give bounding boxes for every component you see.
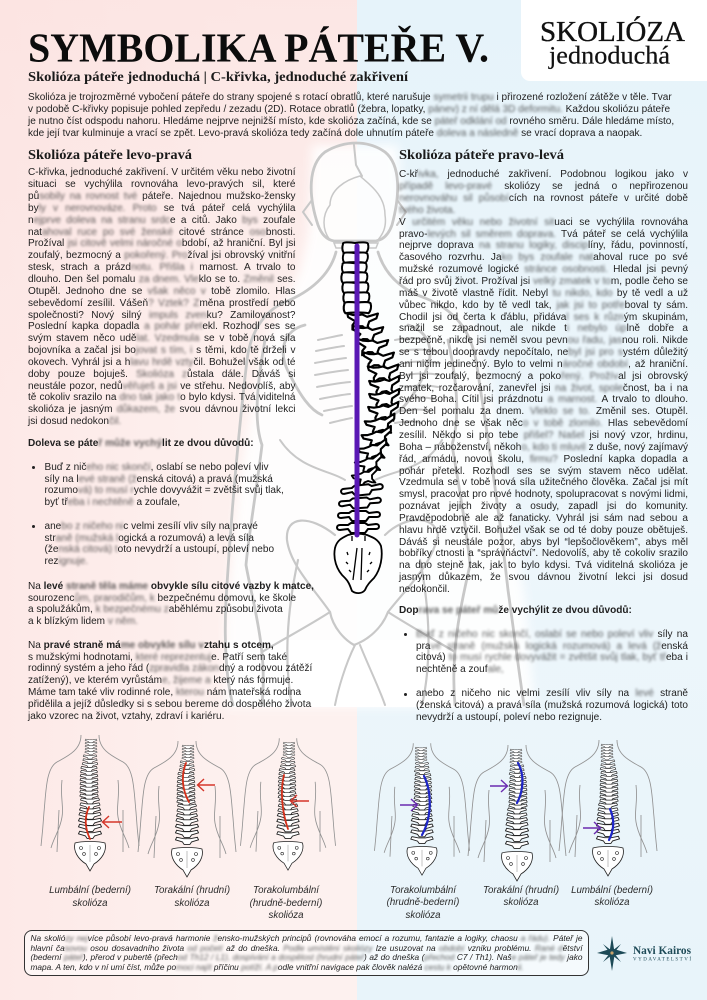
caption: thoracic right: skolióza	[504, 897, 538, 908]
diagram: thoracic right	[468, 745, 566, 881]
list: left column reasons	[32, 461, 284, 568]
caption: lumbar right: skolióza	[594, 897, 630, 908]
text: right column story: na dno stejně tak, jak to bylo kdysi. Tvá viditelná skolióza je	[399, 560, 688, 571]
bullet two: (ženská citová) a pravá síla (mužská rozumová logická) toto	[416, 700, 688, 711]
text: right column story: bezpečně, nikde jsi neměl svou pevnou řadu, jasnou roli. Nikde	[399, 335, 688, 346]
bullet two: anebo z ničeho nic velmi zesílí vliv síly na pravé	[44, 521, 258, 532]
text: right column intro: případě levo-pravé skoliózy se jedná o nepřirozenou	[399, 181, 688, 192]
intro paragraph: kde její tvar kulminuje a vrací se zpět. Levo-pravá skolióza tedy začíná dole uhnutím páteře doleva a následně se vrací doprava a naopak.	[28, 128, 642, 139]
bullet two: anebo z ničeho nic velmi zesílí vliv síly na levé straně	[416, 688, 688, 699]
text: right column story: řád, armádu, novou školu, firmu? Poslední kapka dopadla a	[399, 454, 688, 465]
bullet one: nechtěně a zoufale,	[416, 664, 504, 675]
text: right column story: svého Boha. Cítil jsi prázdnotu a marnost. A trvalo to dlouho.	[399, 394, 688, 405]
callout: bottom note: (bederní páteř), přerod v pubertě (přechod Th12 / L1), dospívání a dospělost (hrudní páteř) až do dneška (přechod C7 / Th1). Naše páteř je tedy jako	[30, 952, 582, 962]
text: right column intro	[398, 168, 688, 216]
text: left column reasons heading: Doleva se páteř může vychýlit ze dvou důvodů:	[28, 438, 254, 449]
text: left column story: Otupěl. Jednoho dne se však něco v tobě zlomilo. Hlas	[28, 286, 295, 297]
caption: thoracic right: Torakální (hrudní)	[483, 884, 559, 896]
text: left column story: působily na rovnost tvé páteře. Najednou mužsko-žensky	[28, 191, 296, 202]
text: left column story: situaci se vychýlila rovnováha levo-pravých sil, které	[28, 179, 296, 190]
background: right blue half	[357, 0, 707, 1000]
text: right column story: Chodil jsi od čerta k ďáblu, přidával ses k různým skupinám,	[399, 312, 688, 323]
text: right column story: Jednoho dne se však něco v tobě zlomilo. Hlas sebevědomí	[399, 418, 688, 429]
text: right column intro: nerovnováhu sil působících na rovnost páteře v určité době	[399, 193, 688, 204]
list: right column reasons	[404, 628, 688, 723]
diagram: lumbar left	[41, 735, 139, 871]
text: left side mother: Na levé straně těla máme obvykle sílu citové vazby k matce,	[28, 581, 314, 592]
text: left column story: Poslední kapka dopadla a pohár přetekl. Rozhodl ses se	[28, 321, 295, 332]
text: right column story: časového rozvrhu. Jako bys zoufale natahoval ruce po své	[399, 252, 688, 263]
caption: thoracolumbar right	[387, 884, 459, 921]
icon: compass star	[597, 936, 627, 971]
diagram: thoracolumbar left	[240, 738, 336, 870]
text: right side father: Máme tam také vliv rodinné role, kterou nám mateřská rodina	[28, 687, 301, 698]
text: right column story: Pravděpodobně ale až fanaticky. Vyhrál jsi sám nad sebou a	[399, 513, 688, 524]
text: right side father	[28, 639, 312, 722]
text: right column story: snažil se zapadnout, ale nikde ti nebylo úplně dobře a	[399, 323, 688, 334]
text: right column story: pohár přetekl. Rozhodl ses se svým stavem něco udělat.	[399, 466, 688, 477]
intro paragraph: v podobě C-křivky popisuje pohled zepředu / zezadu (2D). Rotace obratlů (žebra, lopatky, pánev) z ní dělá 3D deformitu. Každou skoliózu páteře	[28, 104, 670, 115]
bullet two: rezignuje.	[44, 556, 88, 567]
caption: lumbar right: Lumbální (bederní)	[571, 884, 653, 896]
text: left column story: tě cokoliv srazilo na dno tak jako to bylo kdysi. Tvá viditelná	[28, 392, 296, 403]
caption: thoracolumbar left: (hrudně-bederní)	[250, 898, 322, 909]
text: right column story: V určitém věku nebo životní situaci se vychýlila rovnováha	[399, 217, 688, 228]
heading: left column: Skolióza páteře levo-pravá	[28, 147, 192, 162]
text: right column story: bobříky ctnosti a “správňáctví”. Nedovolíš, aby tě cokoliv srazilo	[399, 548, 688, 559]
bullet one: Buď z ničeho nic skončí, oslabí se nebo poleví vliv	[44, 462, 268, 473]
text: left column story: neustále pozor, nedůvěřuješ a jsi ve střehu. Nedovolíš, aby	[28, 381, 296, 392]
bullet one	[415, 628, 688, 675]
text: left column story: doby pouze bojuješ. Skolióza zůstala dále. Dáváš si	[28, 369, 296, 380]
text: right side father: rodinný systém a jeho řád (zpravidla zákondný a rodovou zátěží	[28, 663, 312, 674]
text: right column story: se s tebou doopravdy nepočítalo, nebyl jsi pro systém důležitý	[399, 347, 688, 358]
text: left column story: sebevědomí zesílil. Vášeň? Vztek? Změna prostředí nebo	[28, 298, 296, 309]
caption: thoracic left	[154, 885, 230, 909]
text: left column story: C-křivka, jednoduché zakřivení. V určitém věku nebo životní	[28, 167, 296, 178]
title: SYMBOLIKA PÁTEŘE V.	[28, 24, 489, 70]
bullet one: rozumová) to musí rychle dovyvážit = zvětšit svůj tlak,	[44, 485, 284, 496]
bullet two: (ženská citová) toto nevydrží a ustoupí, poleví nebo	[44, 544, 274, 555]
intro paragraph: Skolióza je trojrozměrné vybočení páteře do strany spojené s rotací obratlů, které narušuje symetrii trupu i přirozené rozložení zátěže v těle. Tvar	[28, 92, 672, 103]
caption: lumbar left: Lumbální (bederní)	[49, 885, 131, 896]
caption: lumbar left	[49, 885, 131, 909]
diagram: thoracolumbar right	[374, 743, 470, 875]
logo tagline: VYDAVATELSTVÍ	[633, 956, 691, 962]
bullet two: nevydrží a ustoupí, poleví nebo rezignuje.	[416, 712, 602, 723]
text: left column story: okovech. Vyhrál jsi a hlavu hrdě vztyčil. Bohužel však od té	[28, 357, 296, 368]
text: right column story	[398, 216, 688, 595]
tag subheading: jednoduchá	[548, 42, 670, 70]
text: left column story: jsi dosud nedokončil.	[28, 416, 121, 427]
text: left side mother: sourozencům, prarodičům, k bezpečnému domovu, ke škole	[28, 593, 296, 604]
callout: bottom note: Na skoliózy nejvíce působí levo-pravá harmonie žensko-mužských principů (rovnováha emocí a rozumu, fantazie a logiky, chaosu a řádu). Páteř je	[30, 933, 582, 943]
caption: thoracolumbar left	[250, 885, 322, 921]
bullet one: síly na levé straně (ženská citová) a pravá (mužská	[44, 474, 273, 485]
text: right side father: přidělila a jejíž důsledky si s sebou bereme do dospělého života	[28, 699, 311, 710]
text: left column story: dlouho. Den šel pomalu za dnem. Vleklo se to. Změnil ses.	[28, 274, 296, 285]
caption: thoracic right	[483, 884, 559, 908]
text: right column intro: C-křivka, jednoduché zakřivení. Podobnou logikou jako v	[399, 169, 688, 180]
bullet one: byť třeba i nechtěně a zoufale,	[44, 497, 180, 508]
bullet two	[416, 688, 688, 723]
text: right column story: zesílil. Někdo si pro tebe přišel? Našel jsi nový vzor, hrdinu,	[399, 430, 688, 441]
caption: thoracic left: Torakální (hrudní)	[154, 885, 230, 896]
text: right column story: máš v životě vlastně řídit. Nebyl tu nikdo, kdo by tě vedl a už	[399, 288, 688, 299]
bullet one: citová) to musí rychle dovyvážit = zvětšit svůj tlak, byť třeba i	[416, 652, 688, 663]
text: right side father: s mužskými hodnotami, které reprezentuje. Patří sem také	[28, 652, 287, 663]
text: left column story: zoufalý, bezmocný a pokořený. Prožíval jsi obrovský vnitřní	[28, 250, 295, 261]
text: right column intro: tvého života.	[399, 205, 455, 216]
text: left column story: Prožíval jsi citově velmi náročné období, až hraniční. Byl jsi	[28, 238, 295, 249]
diagram: thoracic left	[138, 741, 236, 877]
panel: top right title tag	[521, 0, 707, 81]
text: left column story: nejprve doleva na stranu srdce a citů. Jako bys zoufale	[28, 215, 296, 226]
text: right column story: řád pro svůj život. Prožíval jsi velký zmatek v tom, podle čeho se	[399, 276, 688, 287]
text: right column story: nejprve doprava na stranu logiky, disciplíny, řádu, povinností,	[399, 240, 688, 251]
text: right column story: poznávat jejich životy a osudy, zapadl jsi do komunity.	[399, 501, 688, 512]
bullet one: Buď z ničeho nic skončí, oslabí se nebo poleví vliv síly na	[416, 629, 688, 640]
text: right column reasons heading: Doprava se páteř může vychýlit ze dvou důvodů:	[399, 605, 632, 616]
text: left column story: natahoval ruce po své ženské citové stránce osobnosti.	[28, 227, 295, 238]
caption: thoracolumbar right: (hrudně-bederní)	[387, 897, 459, 908]
text: right column story: pravo-levých sil směrem doprava. Tvá páteř se celá vychýlila	[399, 229, 688, 240]
text: right column story: Vzedmula se v tobě nová síla užitečného člověka. Začal jsi mít	[399, 477, 688, 488]
callout: bottom note	[24, 930, 588, 976]
callout: bottom note: mapa. A ten, kdo v ní umí číst, může pomoci najít příčinu potíží. A podle vnitřní navigace pak člověk nalézá cestu k opětovné harmonii.	[30, 962, 524, 972]
diagram: lumbar right	[559, 740, 657, 876]
sacrum	[334, 534, 382, 593]
text: left column story: bojovníka a začal jsi bojovat s tím, i s těmi, kdo tě drželi v	[28, 345, 296, 356]
caption: thoracolumbar right: Torakolumbální	[390, 884, 456, 896]
text: left column story: stesk, strach a prázdnotu. Přišla i marnost. A trvalo to	[28, 262, 295, 273]
text: left column story: skolióza je jasným důkazem, že svou dávnou životní lekci	[28, 404, 295, 415]
text: left side mother: a spolužákům, k bezpečnému zaběhlému způsobu života	[28, 604, 283, 615]
background: left pink half	[0, 0, 357, 1000]
bullet one	[44, 461, 284, 508]
caption: lumbar right	[571, 884, 653, 908]
text: right column story: nedokončil.	[399, 584, 450, 595]
text: right side father: zatížený), ve kterém vyrůstáme, žijeme a který nás formuje.	[28, 675, 293, 686]
subtitle: Skolióza páteře jednoduchá | C-křivka, jednoduché zakřivení	[28, 69, 408, 84]
intro paragraph	[28, 92, 674, 139]
logo: Navi Kairos	[597, 936, 691, 971]
text: right column story: Boha – náboženství, někoho, kdo ti mluvil z duše, nový zajímavý	[399, 442, 688, 453]
text: right column story: smysl, pracovat pro nové hodnoty, spolupracovat s novými lidmi,	[399, 489, 688, 500]
text: right column story: Den šel pomalu za dnem. Vleklo se to. Změnil ses. Otupěl.	[399, 406, 688, 417]
heading: right column: Skolióza páteře pravo-levá	[399, 147, 564, 162]
text: right column story: hlavu hrdě vztyčil. Bohužel však se od té doby pouze obětuješ.	[399, 525, 688, 536]
large spine with vertebrae	[334, 242, 399, 593]
text: right side father: jako vzorec na život, vztahy, zdraví i kariéru.	[28, 711, 224, 722]
text: right column story: Dáváš si neustále pozor, abys byl “lepšočlověkem”, abys měl	[399, 537, 688, 548]
caption: thoracolumbar right: skolióza	[406, 910, 440, 921]
text: left side mother	[28, 580, 314, 627]
bullet one: pravé straně (mužská logická rozumová) a levá (ženská	[416, 641, 688, 652]
tag heading: SKOLIÓZA	[540, 17, 686, 48]
text: left side mother: a k blízkým lidem v něm.	[28, 616, 138, 627]
caption: thoracolumbar left: Torakolumbální	[253, 885, 319, 896]
caption: thoracic left: skolióza	[174, 898, 210, 909]
text: left column story: byly v nerovnováze. Proto se tvá páteř celá vychýlila	[28, 203, 295, 214]
callout: bottom note: hlavní časovou osou dosavadního života od početí až do dneška. Podle umístění skoliózy lze usuzovat na období vzniku problému. Rané dětství	[30, 943, 582, 953]
text: right column story: vůbec nikdo, kdo by tě vedl tak, jak jsi to potřeboval ty sám.	[399, 300, 688, 311]
text: right column story: Byl jsi zoufalý, bezmocný a pokořený. Prožíval jsi obrovský	[399, 371, 688, 382]
bullet two: straně (mužská logická a rozumová) a levá síla	[44, 533, 254, 544]
text: left column story: společnosti? Nový silný impuls zvenku? Zamilovanost?	[28, 310, 296, 321]
caption: thoracolumbar left: skolióza	[268, 910, 304, 921]
bullet two	[44, 520, 274, 568]
text: right column story: ani ničím jedinečný. Bylo to velmi náročné období, až hraniční.	[399, 359, 688, 370]
text: right column story: mužské rozumové logické stránce osobnosti. Hledal jsi pevný	[399, 264, 688, 275]
logo wordmark: Navi Kairos	[633, 943, 691, 957]
text: left column story: svým stavem něco udělat. Vzedmula se v tobě nová síla	[28, 333, 296, 344]
intro paragraph: je nutno číst odspodu nahoru. Hledáme nejprve nejnižší místo, kde skolióza začíná, kde se páteř odklání od rovného směru. Dále hledáme místo,	[28, 116, 674, 127]
text: right column story: jasným důkazem, že svou dávnou životní lekci jsi dosud	[399, 572, 688, 583]
caption: lumbar left: skolióza	[72, 898, 108, 909]
text: left column story	[28, 167, 296, 427]
purple plumb line	[354, 246, 360, 535]
text: right column story: zmatek, rozčarování, zanevřel jsi na život, společnost, ba i na	[399, 383, 688, 394]
text: right side father: Na pravé straně máme obvykle sílu vztahu s otcem,	[28, 640, 274, 651]
